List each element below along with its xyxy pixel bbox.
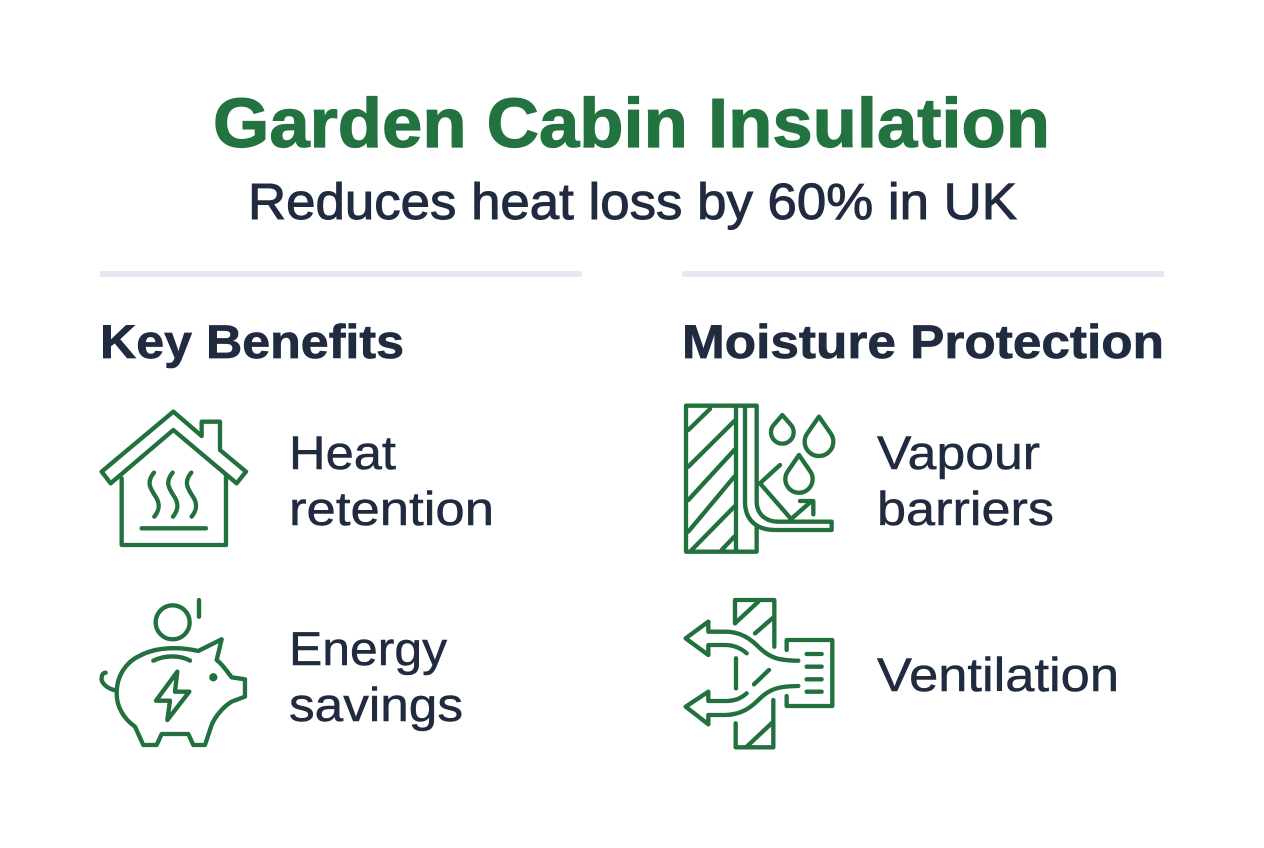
icon: piggy bank with bolt [102, 600, 245, 745]
label: vapour barriers: barriers [877, 482, 1054, 535]
icon: vapour barrier wall with drops [686, 406, 833, 552]
subtitle: Reduces heat loss by 60% in UK [248, 173, 1017, 230]
icon: ventilation arrows [686, 600, 832, 747]
panel: moisture protection [682, 315, 1164, 747]
title: Garden Cabin Insulation [213, 84, 1050, 162]
label: vapour barriers: Vapour [877, 426, 1040, 479]
label: energy savings: savings [289, 678, 463, 731]
label: heat retention: retention [289, 482, 494, 535]
heading: moisture protection: Moisture Protection [682, 315, 1164, 368]
label: ventilation: Ventilation [877, 648, 1119, 701]
label: vapour barriers [877, 426, 1054, 535]
label: energy savings [289, 622, 463, 731]
label: heat retention: Heat [289, 426, 396, 479]
label: heat retention [289, 426, 494, 535]
icon: house with heat [102, 412, 246, 545]
label: energy savings: Energy [289, 622, 448, 675]
heading: key benefits: Key Benefits [100, 315, 404, 368]
panel: key benefits [100, 315, 494, 745]
